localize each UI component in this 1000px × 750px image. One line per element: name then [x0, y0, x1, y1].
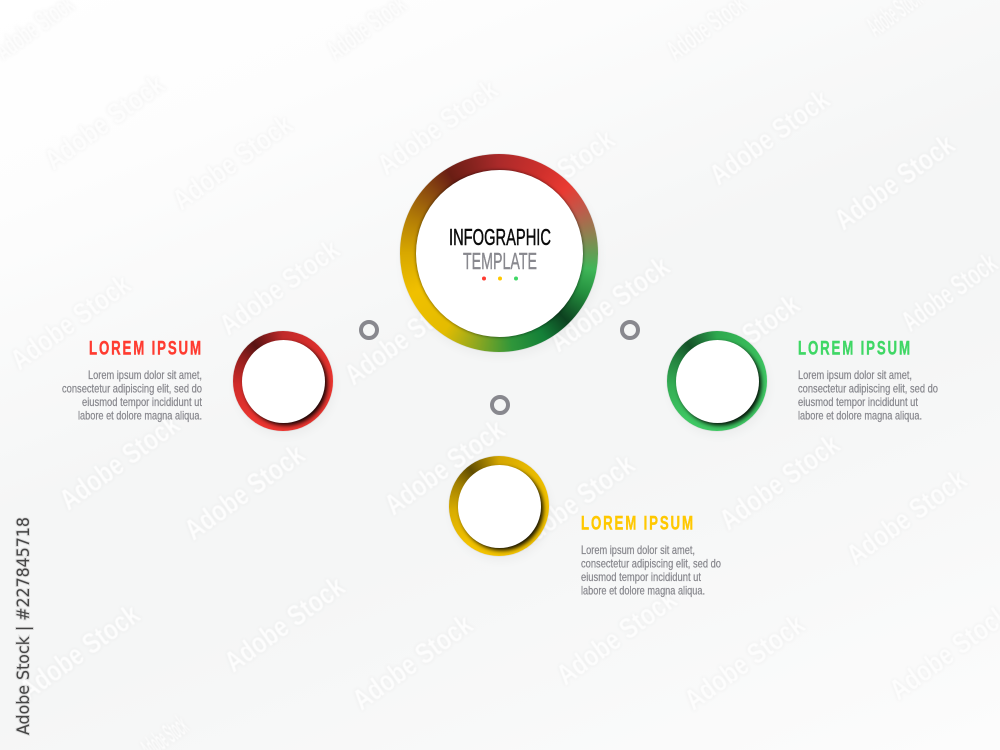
watermark pattern: Adobe Stock — [54, 408, 186, 517]
watermark pattern: Adobe Stock — [551, 583, 683, 692]
watermark pattern: Adobe Stock — [489, 123, 621, 232]
watermark pattern: Adobe Stock — [179, 438, 311, 547]
watermark pattern: Adobe Stock — [829, 128, 961, 237]
yellow ring white disc — [458, 464, 540, 548]
central white disc — [416, 170, 582, 336]
step ring: green — [667, 331, 767, 431]
text block: red step: consectetur adipiscing elit, sed do — [62, 382, 202, 396]
stock id side label: Adobe Stock | #227845718 — [14, 517, 34, 735]
title: INFOGRAPHIC — [449, 224, 551, 250]
watermark pattern: Adobe Stock — [714, 428, 846, 537]
text block: green step: consectetur adipiscing elit, sed do — [798, 382, 938, 396]
text block: red step: labore et dolore magna aliqua. — [78, 408, 202, 422]
central ring: infographic hub — [400, 154, 598, 352]
watermark pattern: Adobe Stock — [509, 448, 641, 557]
watermark pattern: Adobe Stock — [379, 413, 511, 522]
watermark pattern: Adobe Stock — [14, 598, 146, 707]
text block: red step: eiusmod tempor incididunt ut — [82, 395, 203, 409]
text block: yellow step: labore et dolore magna aliqua. — [581, 584, 705, 598]
text block: red step — [62, 337, 203, 422]
step ring: red — [233, 331, 333, 431]
watermark pattern: Adobe Stock — [214, 233, 346, 342]
text block: yellow step — [581, 512, 721, 598]
text block: yellow step: Lorem ipsum dolor sit amet, — [581, 543, 695, 557]
title indicator dots — [482, 276, 518, 280]
watermark pattern: Adobe Stock — [5, 268, 137, 377]
watermark pattern: Adobe Stock — [679, 608, 811, 717]
connector dot: bottom — [490, 395, 510, 415]
text block: green step: LOREM IPSUM — [798, 337, 910, 359]
text block: yellow step: eiusmod tempor incididunt ut — [581, 570, 702, 584]
text block: green step: Lorem ipsum dolor sit amet, — [798, 368, 912, 382]
title: TEMPLATE — [463, 248, 537, 274]
watermark pattern: Adobe Stock — [39, 68, 171, 177]
red ring white disc — [242, 340, 324, 422]
watermark pattern: Adobe Stock — [339, 283, 471, 392]
watermark pattern: Adobe Stock — [372, 73, 504, 182]
watermark pattern: Adobe Stock — [544, 250, 676, 359]
watermark pattern: Adobe Stock — [167, 108, 299, 217]
text block: red step: LOREM IPSUM — [89, 337, 201, 359]
green ring white disc — [676, 340, 758, 422]
step ring: yellow — [449, 456, 549, 556]
title — [449, 224, 551, 274]
text block: green step: labore et dolore magna aliqua. — [798, 408, 922, 422]
watermark pattern: Adobe Stock — [674, 288, 806, 397]
text block: red step: Lorem ipsum dolor sit amet, — [88, 368, 202, 382]
connector dot: left — [359, 320, 379, 340]
watermark pattern: Adobe Stock — [841, 463, 973, 572]
text block: yellow step: LOREM IPSUM — [581, 512, 693, 534]
connector dot: right — [620, 320, 640, 340]
text block: green step: eiusmod tempor incididunt ut — [798, 395, 919, 409]
watermark pattern: Adobe Stock — [347, 608, 479, 717]
watermark pattern: Adobe Stock — [704, 83, 836, 192]
text block: green step — [798, 337, 938, 422]
text block: yellow step: consectetur adipiscing elit, sed do — [581, 556, 721, 570]
watermark pattern: Adobe Stock — [219, 570, 351, 679]
